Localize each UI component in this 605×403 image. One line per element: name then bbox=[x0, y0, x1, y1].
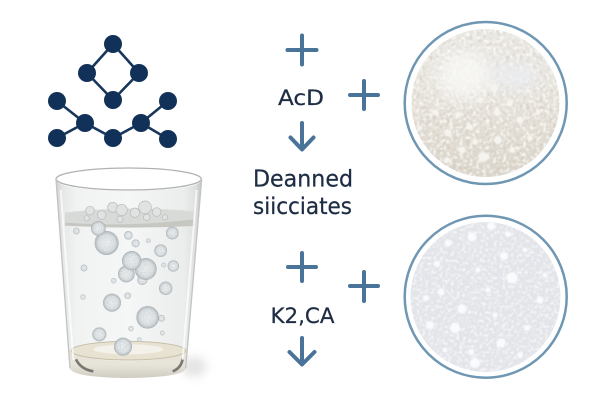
water surface foam bbox=[65, 201, 194, 228]
arrow: down from AcD bbox=[290, 123, 314, 150]
arrow: down from K2,CA bbox=[290, 338, 314, 364]
label: Deanned siicciates bbox=[253, 166, 353, 220]
icon: glass of water with bubbles bbox=[56, 168, 207, 378]
salt grains bbox=[418, 84, 540, 163]
label: Deanned siicciates: siicciates bbox=[253, 194, 352, 220]
plus sign: lower centre bbox=[288, 253, 316, 281]
label: AcD: AcD bbox=[278, 86, 324, 111]
infographic bbox=[48, 20, 568, 379]
plus sign: top centre bbox=[288, 36, 316, 64]
glass body bbox=[56, 179, 202, 378]
glass shadow bbox=[181, 357, 207, 377]
bubbles bbox=[73, 221, 179, 356]
label: Deanned siicciates: Deanned bbox=[253, 166, 353, 192]
plus sign: lower right bbox=[350, 272, 378, 301]
glass rim bbox=[56, 168, 202, 368]
icon: molecule network bbox=[48, 35, 177, 148]
panel: white foam beads circle bbox=[405, 216, 567, 378]
plus sign: top right bbox=[350, 81, 378, 109]
glass base bbox=[68, 348, 187, 378]
label: K2,CA: K2,CA bbox=[270, 304, 335, 328]
foam beads bbox=[423, 222, 548, 368]
panel: coarse salt circle bbox=[405, 22, 567, 184]
